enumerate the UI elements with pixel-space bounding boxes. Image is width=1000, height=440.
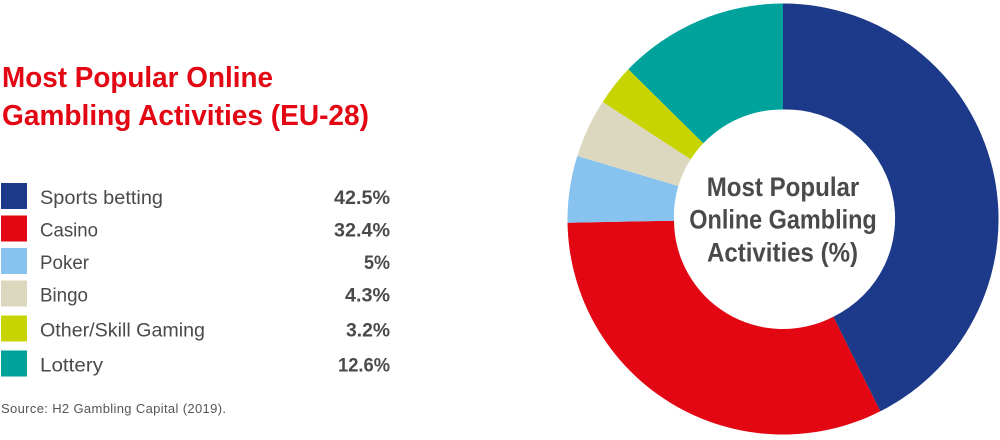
donut center label: Activities (%) bbox=[707, 238, 858, 268]
legend row: lottery bbox=[1, 350, 390, 376]
legend row: bingo bbox=[1, 280, 390, 306]
legend row: poker: Poker bbox=[40, 253, 90, 274]
legend row: sports betting: Sports betting bbox=[40, 188, 163, 209]
legend row: poker bbox=[1, 248, 390, 274]
segment: bingo bbox=[577, 102, 691, 186]
title: Gambling Activities (EU-28) bbox=[2, 100, 369, 132]
legend row: casino bbox=[1, 216, 390, 242]
legend row: casino: Casino bbox=[40, 220, 98, 242]
donut center label bbox=[689, 172, 877, 268]
legend row: poker: 5% bbox=[364, 253, 390, 274]
legend row: other/skill gaming bbox=[1, 316, 390, 342]
donut center label: Online Gambling bbox=[689, 204, 877, 234]
legend row: lottery: Lottery bbox=[40, 356, 104, 376]
legend row: other/skill gaming: Other/Skill Gaming bbox=[40, 320, 205, 342]
legend row: bingo: 4.3% bbox=[345, 286, 390, 306]
legend row: sports betting bbox=[1, 183, 390, 209]
donut center label: Most Popular bbox=[707, 172, 859, 202]
legend row: other/skill gaming: 3.2% bbox=[346, 320, 390, 342]
donut chart bbox=[567, 3, 999, 435]
segment: poker bbox=[567, 156, 678, 223]
title: Most Popular Online bbox=[2, 62, 273, 94]
title bbox=[2, 62, 369, 132]
segment: sports betting bbox=[783, 3, 999, 411]
segment: other/skill gaming bbox=[603, 69, 703, 159]
legend row: bingo: Bingo bbox=[40, 286, 88, 306]
legend row: sports betting: 42.5% bbox=[334, 188, 390, 209]
segment: casino bbox=[568, 221, 880, 435]
segment: lottery bbox=[628, 4, 783, 143]
source note: Source: H2 Gambling Capital (2019). bbox=[1, 401, 226, 416]
legend row: casino: 32.4% bbox=[334, 220, 390, 242]
legend row: lottery: 12.6% bbox=[338, 356, 390, 376]
legend bbox=[1, 183, 390, 376]
